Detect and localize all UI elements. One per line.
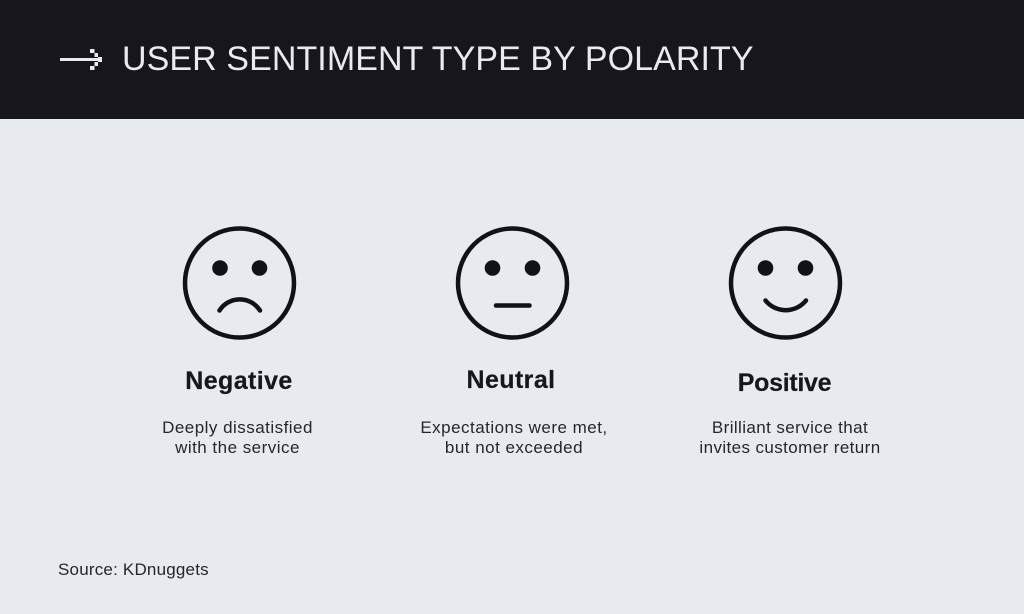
heading: negative: Negative [185,367,293,395]
description: negative [162,418,313,457]
description: positive [699,418,881,457]
title: USER SENTIMENT TYPE BY POLARITY [122,40,754,78]
description: negative: Deeply dissatisfied [162,418,313,437]
description: neutral: Expectations were met, [420,418,608,437]
heading: positive: Positive [738,369,831,397]
source note: Source: KDnuggets [58,560,209,579]
description: neutral [420,418,608,457]
description: positive: Brilliant service that [712,418,868,437]
description: neutral: but not exceeded [445,438,583,457]
heading: neutral: Neutral [467,366,555,394]
icon: arrow [60,49,102,70]
header band [0,0,1024,119]
description: negative: with the service [175,438,300,457]
description: positive: invites customer return [699,438,881,457]
